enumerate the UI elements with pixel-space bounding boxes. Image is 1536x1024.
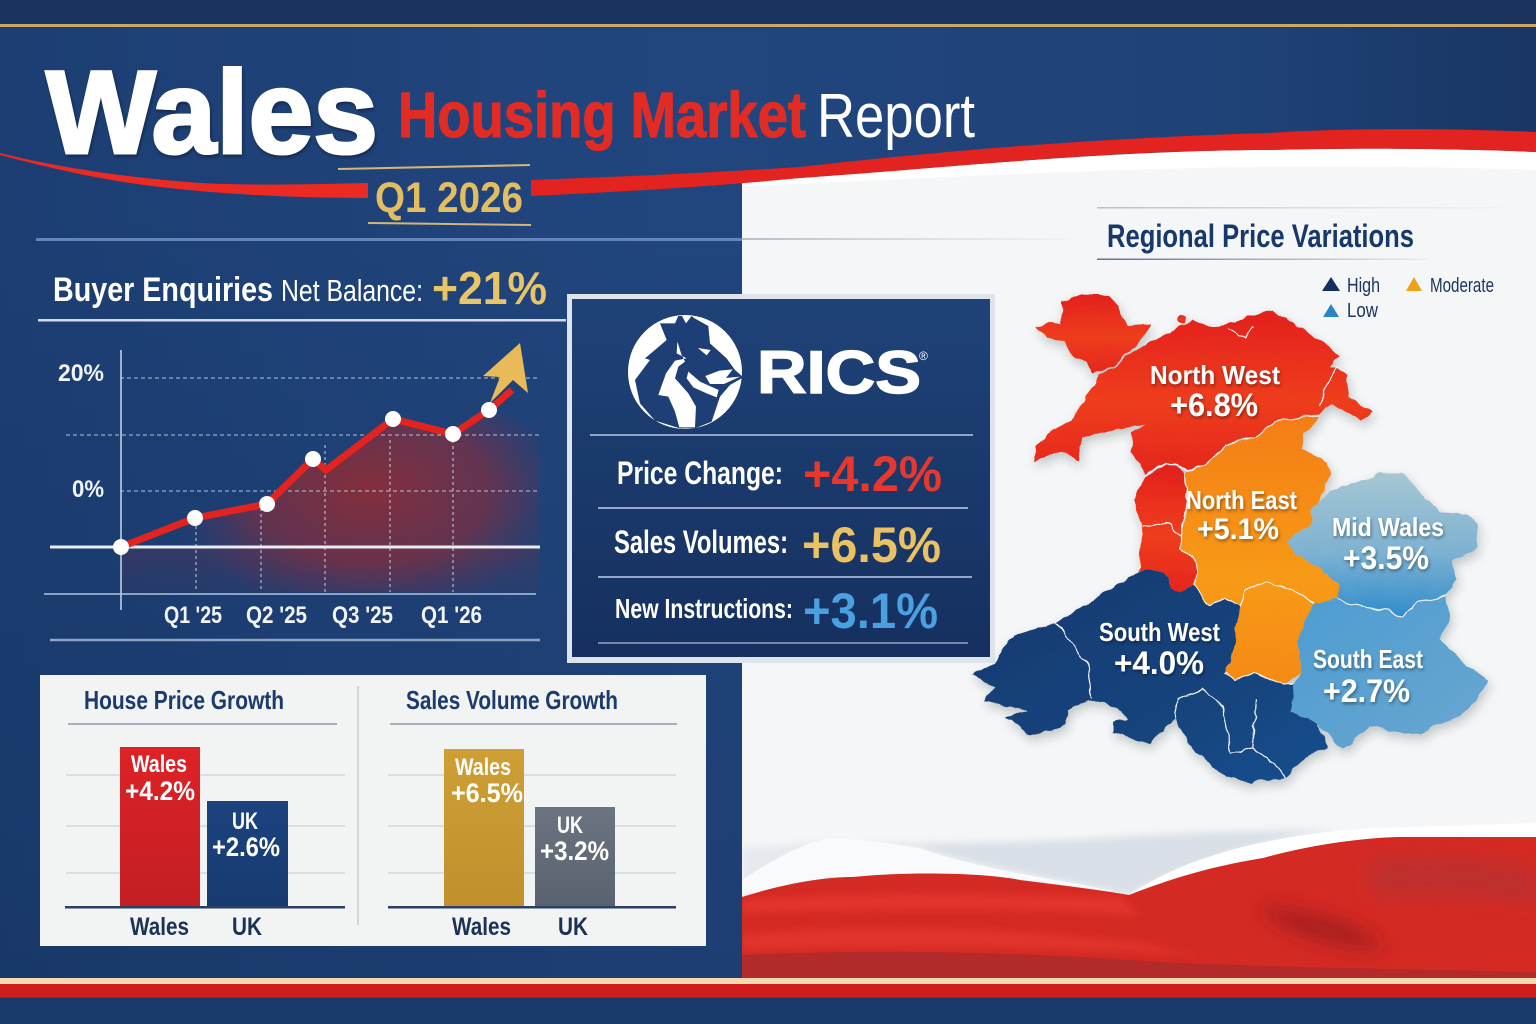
bar: Wales sales volume (444, 749, 524, 907)
label: South East: +2.7% (1323, 673, 1410, 709)
legend item: high: High (1347, 275, 1380, 297)
bar: UK sales volume: UK (557, 812, 583, 839)
bar: UK house price: UK (232, 808, 258, 835)
label: Mid Wales: Mid Wales (1332, 512, 1444, 542)
title word: Report: Report (817, 82, 975, 151)
white swoosh under red ribbon (742, 149, 1536, 200)
chart: sales volume growth: UK (558, 913, 588, 941)
bar: UK sales volume: +3.2% (540, 836, 609, 866)
region: North West (1035, 294, 1372, 593)
stat: sales volumes (614, 517, 941, 573)
chart gridlines and axes (44, 350, 540, 640)
bar: UK house price: +2.6% (212, 832, 280, 862)
stat: new instructions (615, 583, 938, 639)
wave left grey (742, 844, 808, 879)
map: Wales regions (972, 294, 1489, 782)
heading: buyer enquiries: +21% (432, 262, 547, 314)
panel: RICS key figures (567, 294, 995, 663)
label: South West: +4.0% (1114, 645, 1204, 681)
data points (113, 402, 497, 555)
chart: sales volume growth: Sales Volume Growth (406, 685, 618, 715)
panel: RICS key figures: ® (919, 349, 928, 363)
label: South East: South East (1313, 644, 1423, 674)
axis labels: Q1 '25 (164, 602, 222, 629)
legend item: moderate (1406, 275, 1494, 297)
logo wordmark: RICS: RICS (757, 339, 921, 406)
wave highlights and shadows (742, 856, 1536, 978)
title (46, 47, 975, 179)
label: South West (1099, 617, 1220, 681)
label: Mid Wales (1332, 512, 1444, 576)
red wave base (742, 837, 1536, 978)
line chart: buyer enquiries (44, 343, 540, 640)
label: North West (1150, 360, 1280, 423)
legend item: low: Low (1347, 300, 1378, 322)
region: Mid Wales (1287, 473, 1478, 618)
heading: regional price variations: Regional Price Variations (1107, 218, 1414, 254)
region: North East (1180, 415, 1339, 684)
title word: Wales: Wales (46, 47, 378, 179)
axis labels: 20% (58, 360, 104, 387)
area under line (121, 410, 540, 592)
bar: UK house price (207, 801, 288, 907)
top dark strip (0, 0, 1536, 25)
background: left panel shading (0, 200, 742, 990)
legend item: low (1323, 300, 1378, 322)
chart: house price growth (65, 685, 345, 941)
top gold rule (0, 24, 1536, 27)
stat: price change: Price Change: (617, 455, 783, 491)
period badge: Q1 2026: Q1 2026 (375, 174, 523, 222)
bar: Wales house price: Wales (131, 751, 187, 778)
label: North East: North East (1186, 485, 1297, 515)
title words: Housing Market: Housing Market (398, 79, 806, 151)
bar: Wales house price (120, 747, 200, 907)
region: South East (1290, 596, 1489, 750)
wave shadow (892, 828, 1318, 895)
legend item: moderate: Moderate (1430, 275, 1494, 297)
red ribbon right segment (531, 129, 1536, 196)
icon: RICS lion logo (628, 315, 743, 429)
stat: price change (617, 446, 942, 502)
data line (121, 390, 512, 547)
background: right light panel (742, 167, 1536, 990)
stat: new instructions: +3.1% (803, 583, 938, 639)
axis labels: Q2 '25 (246, 602, 307, 629)
footer stripes (0, 978, 1536, 1024)
map labels (1099, 360, 1444, 709)
red ribbon left segment (0, 153, 368, 198)
stat: price change: +4.2% (803, 446, 942, 502)
period badge: Q1 2026 (338, 165, 531, 225)
chart: house price growth: UK (232, 913, 262, 941)
label: Mid Wales: +3.5% (1343, 540, 1429, 576)
label: North East (1186, 485, 1297, 546)
stat: sales volumes: +6.5% (802, 517, 941, 573)
chart: sales volume growth (388, 685, 677, 941)
heading: buyer enquiries (38, 262, 566, 322)
axis labels (58, 360, 482, 629)
chart: house price growth: Wales (130, 913, 189, 941)
label: North West: North West (1150, 360, 1280, 390)
white fold left (742, 838, 1129, 897)
region boundaries (1056, 327, 1446, 777)
axis labels: Q3 '25 (332, 602, 393, 629)
bar: Wales house price: +4.2% (125, 776, 195, 806)
chart baseline (50, 546, 540, 548)
stat: new instructions: New Instructions: (615, 593, 793, 624)
heading: buyer enquiries: Net Balance: (281, 273, 423, 308)
heading: buyer enquiries: Buyer Enquiries (53, 271, 273, 309)
white fold right (1129, 823, 1536, 895)
label: South East (1313, 644, 1423, 709)
chart: sales volume growth: Wales (452, 913, 511, 941)
axis labels: Q1 '26 (421, 602, 482, 629)
label: South West: South West (1099, 617, 1220, 647)
legend (1322, 275, 1494, 322)
decorative wave: bottom right (742, 823, 1536, 978)
bar: Wales sales volume: Wales (455, 754, 511, 781)
label: North East: +5.1% (1197, 513, 1279, 546)
axis labels: 0% (72, 476, 104, 503)
panel: growth comparison (40, 675, 706, 946)
bar: Wales sales volume: +6.5% (451, 778, 523, 808)
chart: house price growth: House Price Growth (84, 685, 284, 715)
stat: sales volumes: Sales Volumes: (614, 524, 788, 560)
arrow: rising trend (483, 343, 528, 403)
divider rule across panels (36, 238, 1070, 241)
legend item: high (1322, 275, 1380, 297)
label: North West: +6.8% (1170, 387, 1258, 423)
region: South West (972, 571, 1328, 782)
bar: UK sales volume (535, 807, 615, 907)
